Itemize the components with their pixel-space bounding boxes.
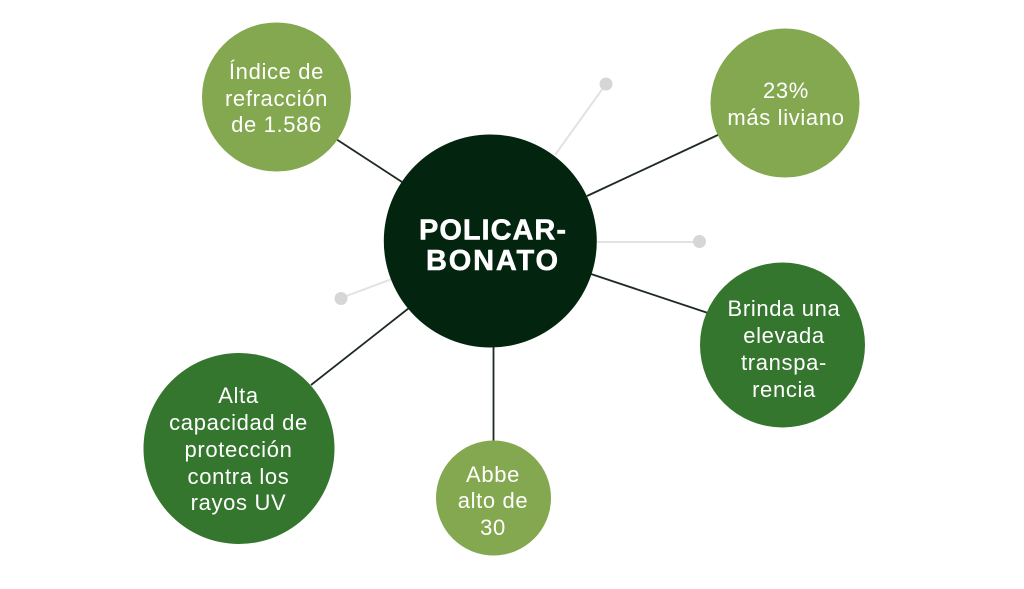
decorative branch: left grey node <box>334 279 392 305</box>
connector: centre to transparency <box>591 274 708 313</box>
node: UV protection: capacidad de <box>169 410 308 435</box>
node: UV protection: protección <box>184 437 293 462</box>
central node: policarbonato <box>384 134 597 348</box>
node: refractive index: de 1.586 <box>231 112 322 137</box>
decorative branch: top right grey node <box>555 78 612 155</box>
node: 23% lighter: 23% <box>763 78 809 103</box>
connector: centre to lighter <box>587 134 720 196</box>
decorative branch: right grey node <box>597 235 706 248</box>
node: UV protection: contra los <box>188 464 289 489</box>
connector: centre to refractive index <box>336 139 402 182</box>
connector: centre to UV protection <box>311 308 409 385</box>
node: refractive index: Índice de <box>229 59 324 84</box>
node: Abbe value <box>436 440 551 556</box>
node: high transparency: elevada <box>743 323 825 348</box>
node: Abbe value: 30 <box>480 515 506 540</box>
node: high transparency: transpa- <box>741 350 827 375</box>
connector: centre to Abbe <box>492 346 494 442</box>
node: UV protection: Alta <box>218 383 259 408</box>
node: Abbe value: alto de <box>458 488 528 513</box>
node: high transparency <box>700 262 865 428</box>
node: UV protection: rayos UV <box>191 490 286 515</box>
node: high transparency: Brinda una <box>728 296 841 321</box>
node: high transparency: rencia <box>752 377 816 402</box>
node: Abbe value: Abbe <box>466 462 520 487</box>
central node: policarbonato: POLICAR- <box>419 214 566 246</box>
node: 23% lighter <box>710 28 860 178</box>
node: refractive index: refracción <box>225 86 328 111</box>
central node: policarbonato: BONATO <box>426 245 558 277</box>
node: 23% lighter: más liviano <box>727 105 845 130</box>
node: UV protection <box>144 353 334 544</box>
node: refractive index <box>202 22 351 172</box>
